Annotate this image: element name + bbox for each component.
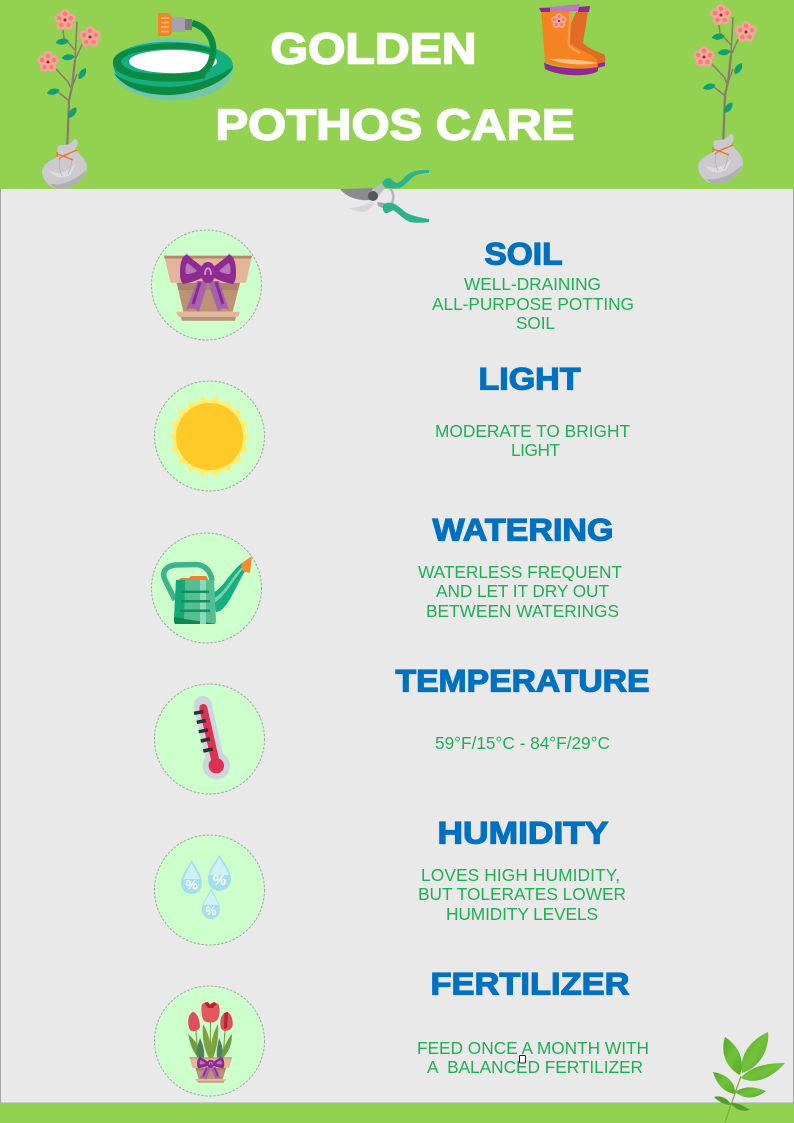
- humidity heading: HUMIDITY: [438, 814, 608, 850]
- light text: LIGHT: [511, 440, 560, 460]
- panel: temperature: [154, 662, 650, 794]
- icon: pruning shears: [340, 170, 429, 223]
- fertilizer text: A BALANCED FERTILIZER: [427, 1057, 643, 1077]
- watering can icon: [152, 533, 262, 643]
- water drops icon: %: [213, 872, 226, 889]
- humidity text: BUT TOLERATES LOWER: [418, 884, 626, 904]
- watering text: BETWEEN WATERINGS: [426, 601, 619, 621]
- humidity text: LOVES HIGH HUMIDITY,: [421, 865, 620, 885]
- panel: fertilizer: [154, 966, 649, 1096]
- soil text: WELL-DRAINING: [464, 274, 601, 294]
- icon: leaf branch: [713, 1032, 785, 1122]
- humidity text: [418, 865, 626, 924]
- panel: humidity: [154, 814, 626, 945]
- text cursor marker: [520, 1056, 526, 1063]
- water drops icon: %: [206, 904, 217, 918]
- header band: [0, 0, 794, 189]
- fertilizer text: FEED ONCE A MONTH WITH: [417, 1038, 649, 1058]
- water drops icon: [154, 835, 264, 945]
- title: [216, 24, 574, 150]
- panel: light: [154, 360, 630, 491]
- watering text: [418, 562, 622, 621]
- icon: flowering plant left: [37, 9, 101, 189]
- watering text: WATERLESS FREQUENT: [418, 562, 622, 582]
- soil text: [432, 274, 634, 333]
- humidity text: HUMIDITY LEVELS: [446, 904, 598, 924]
- panel: watering: [152, 512, 622, 643]
- title: POTHOS CARE: [216, 100, 574, 150]
- icon: garden hose: [113, 13, 233, 100]
- soil text: ALL-PURPOSE POTTING: [432, 294, 634, 314]
- sun icon: [154, 381, 264, 491]
- fertilizer heading: FERTILIZER: [430, 966, 630, 1002]
- tulips in pot icon: [154, 986, 264, 1096]
- footer band: [0, 1103, 794, 1123]
- icon: rubber boots: [539, 4, 605, 75]
- watering heading: WATERING: [432, 512, 614, 548]
- icon: flowering plant right: [693, 4, 757, 184]
- watering text: AND LET IT DRY OUT: [436, 581, 609, 601]
- light text: MODERATE TO BRIGHT: [435, 421, 630, 441]
- soil heading: SOIL: [484, 236, 562, 272]
- light text: [435, 421, 630, 460]
- fertilizer text: [417, 1038, 649, 1077]
- water drops icon: %: [185, 876, 198, 892]
- panel: soil: [152, 230, 634, 340]
- title: GOLDEN: [270, 24, 476, 74]
- soil icon: [152, 230, 262, 340]
- soil text: SOIL: [516, 313, 555, 333]
- temperature heading: TEMPERATURE: [396, 662, 650, 698]
- thermometer icon: [154, 684, 264, 794]
- temperature text: 59°F/15°C - 84°F/29°C: [435, 733, 610, 753]
- light heading: LIGHT: [478, 360, 580, 396]
